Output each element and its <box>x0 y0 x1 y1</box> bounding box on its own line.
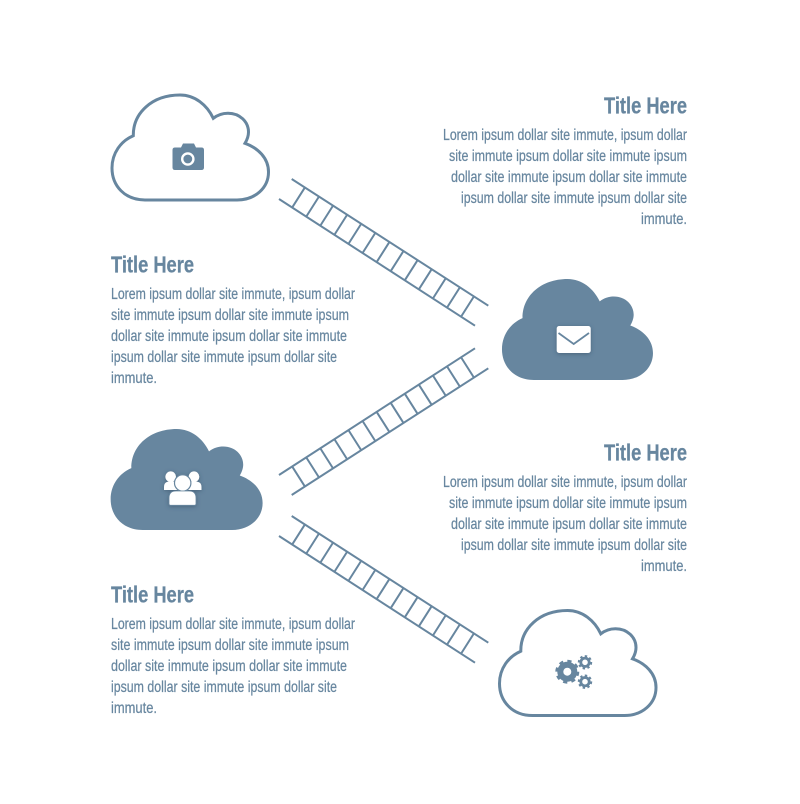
body copy <box>443 474 687 575</box>
heading: Title Here <box>111 582 194 608</box>
cloud: people filled <box>111 429 263 530</box>
body copy: ipsum dollar site immute ipsum dollar site <box>461 190 687 207</box>
body copy: Lorem ipsum dollar site immute, ipsum dollar <box>443 127 687 144</box>
body copy: ipsum dollar site immute ipsum dollar site <box>461 537 687 554</box>
body copy: site immute ipsum dollar site immute ipsum <box>111 307 349 324</box>
body copy <box>443 127 687 228</box>
heading: Title Here <box>111 252 194 278</box>
body copy: site immute ipsum dollar site immute ipsum <box>449 495 687 512</box>
body copy: ipsum dollar site immute ipsum dollar site <box>111 679 337 696</box>
cloud: gears outline <box>500 610 656 716</box>
ladder: middle connector <box>279 348 488 495</box>
body copy: immute. <box>641 558 687 575</box>
icon: people <box>164 471 202 505</box>
cloud: camera outline <box>112 95 268 200</box>
body copy: dollar site immute ipsum dollar site immute <box>111 658 347 675</box>
body copy: site immute ipsum dollar site immute ipsum <box>111 637 349 654</box>
icon: envelope <box>557 326 591 353</box>
body copy: immute. <box>641 211 687 228</box>
heading: Title Here <box>604 440 687 466</box>
body copy: immute. <box>111 700 157 717</box>
body copy: Lorem ipsum dollar site immute, ipsum dollar <box>111 616 355 633</box>
body copy: ipsum dollar site immute ipsum dollar site <box>111 349 337 366</box>
ladder: top connector <box>279 179 488 326</box>
body copy: immute. <box>111 370 157 387</box>
text block: lower right <box>443 440 687 575</box>
body copy: Lorem ipsum dollar site immute, ipsum dollar <box>443 474 687 491</box>
text block: upper left <box>111 252 355 387</box>
icon: gears <box>557 656 591 688</box>
body copy <box>111 286 355 387</box>
icon: camera <box>172 144 204 170</box>
body copy: dollar site immute ipsum dollar site immute <box>111 328 347 345</box>
body copy: Lorem ipsum dollar site immute, ipsum dollar <box>111 286 355 303</box>
body copy: site immute ipsum dollar site immute ipsum <box>449 148 687 165</box>
text block: lower left <box>111 582 355 717</box>
heading: Title Here <box>604 92 687 118</box>
cloud: mail filled <box>502 279 653 380</box>
text block: top right <box>443 92 687 228</box>
body copy: dollar site immute ipsum dollar site immute <box>451 516 687 533</box>
ladder: bottom connector <box>279 516 488 663</box>
body copy: dollar site immute ipsum dollar site immute <box>451 169 687 186</box>
body copy <box>111 616 355 717</box>
